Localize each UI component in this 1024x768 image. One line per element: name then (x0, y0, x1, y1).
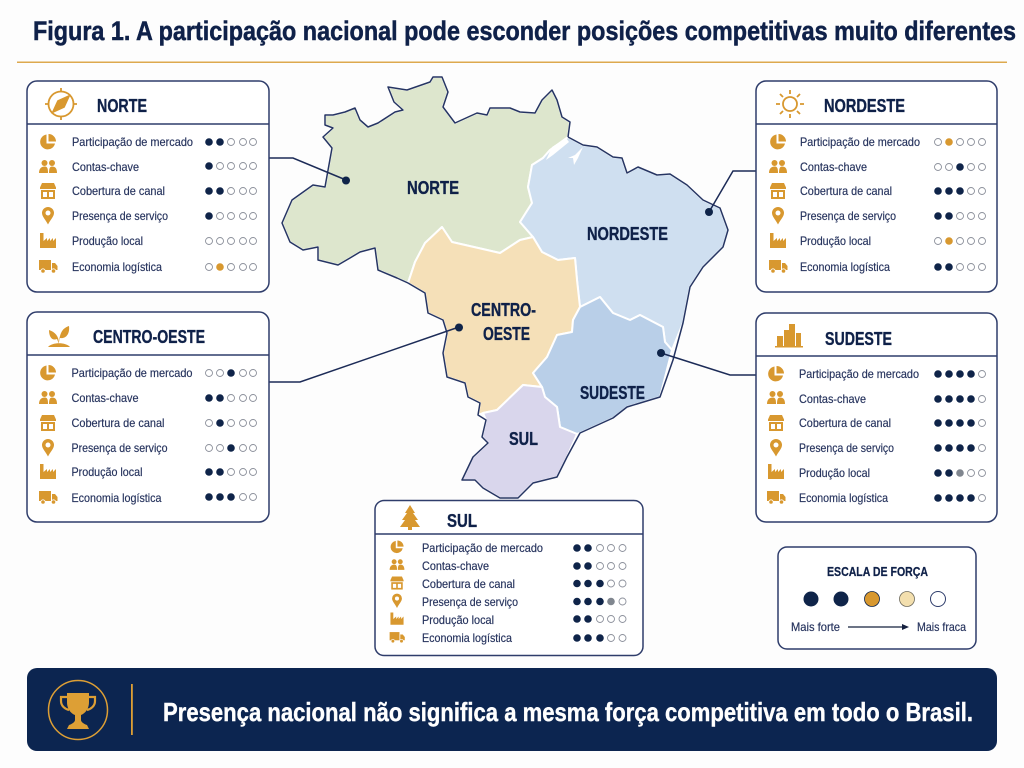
row: Cobertura de canal: Cobertura de canal (72, 416, 164, 430)
row: Contas-chave (769, 160, 986, 174)
row: Participação de mercado: Participação de mercado (72, 366, 193, 380)
row: Produção local: Produção local (800, 234, 871, 248)
row: Produção local (40, 464, 256, 479)
row: Presença de serviço (392, 594, 626, 609)
row: Economia logística (39, 491, 256, 505)
legend: escala de força: ESCALA DE FORÇA (827, 564, 928, 579)
panel: Centro-Oeste (27, 312, 269, 522)
row: Participação de mercado: Participação de mercado (799, 367, 919, 381)
row: Presença de serviço: Presença de serviço (799, 441, 894, 455)
heading: NORDESTE (824, 96, 905, 116)
row: Participação de mercado: Participação de mercado (422, 541, 543, 555)
panel: Nordeste (756, 81, 997, 292)
legend: escala de força: Mais fraca (917, 620, 966, 634)
row: Cobertura de canal: Cobertura de canal (72, 184, 165, 198)
heading: SUDESTE (825, 329, 892, 349)
icon: sprout (48, 326, 70, 347)
icon: compass (45, 88, 77, 120)
row: Presença de serviço: Presença de serviço (800, 209, 896, 223)
region: Norte (282, 77, 570, 283)
row: Produção local (768, 464, 986, 480)
leader: Nordeste (705, 171, 756, 216)
map label: CENTRO-OESTE (471, 300, 536, 344)
row: Presença de serviço: Presença de serviço (72, 209, 168, 223)
icon: sun (776, 90, 804, 118)
row: Contas-chave (390, 559, 626, 573)
row: Produção local (770, 233, 986, 248)
panel: Sul (375, 500, 643, 656)
heading: NORTE (97, 96, 147, 116)
row: Contas-chave: Contas-chave (799, 392, 866, 406)
row: Participação de mercado: Participação de mercado (800, 135, 920, 149)
row: Cobertura de canal (768, 415, 986, 431)
region: Sul (462, 385, 577, 498)
row: Economia logística (767, 491, 986, 505)
row: Cobertura de canal: Cobertura de canal (799, 416, 891, 430)
row: Participação de mercado (770, 134, 986, 149)
row: Contas-chave: Contas-chave (422, 559, 489, 573)
region: Nordeste (520, 137, 728, 350)
row: Produção local (40, 233, 256, 248)
map label: SUDESTE: SUDESTE (580, 383, 645, 403)
row: Contas-chave (39, 160, 256, 174)
row: Produção local: Produção local (72, 465, 142, 479)
icon: bars (775, 324, 803, 348)
legend: escala de força (778, 547, 976, 649)
row: Cobertura de canal (40, 183, 256, 199)
row: Contas-chave (39, 391, 256, 405)
leader: Norte (269, 158, 350, 184)
row: Participação de mercado (40, 134, 257, 149)
row: Presença de serviço: Presença de serviço (72, 441, 168, 455)
heading: CENTRO-OESTE (93, 327, 205, 347)
map of Brazil (282, 77, 728, 498)
row: Presença de serviço (42, 207, 256, 224)
row: Contas-chave (767, 391, 986, 406)
banner (27, 668, 997, 751)
row: Produção local: Produção local (799, 466, 870, 480)
row: Economia logística: Economia logística (800, 260, 890, 274)
icon: trophy (48, 680, 108, 740)
panel: Norte (27, 81, 269, 292)
row: Produção local: Produção local (422, 613, 494, 627)
row: Contas-chave: Contas-chave (800, 160, 867, 174)
map label: NORDESTE: NORDESTE (587, 224, 668, 244)
row: Participação de mercado: Participação de mercado (72, 135, 193, 149)
row: Cobertura de canal (40, 415, 256, 431)
row: Produção local: Produção local (72, 234, 143, 248)
region: Sudeste (533, 297, 672, 434)
row: Economia logística: Economia logística (72, 491, 162, 505)
panel: Sudeste (756, 313, 997, 522)
row: Participação de mercado (768, 366, 986, 381)
row: Economia logística (769, 260, 986, 274)
row: Economia logística: Economia logística (72, 260, 162, 274)
row: Economia logística (39, 260, 256, 274)
row: Cobertura de canal (390, 576, 626, 591)
leader: Sudeste (657, 349, 756, 375)
row: Presença de serviço: Presença de serviço (422, 595, 518, 609)
row: Contas-chave: Contas-chave (72, 160, 139, 174)
row: Presença de serviço (770, 439, 986, 456)
row: Cobertura de canal (770, 183, 986, 199)
row: Economia logística (390, 631, 626, 645)
row: Economia logística: Economia logística (422, 631, 512, 645)
legend: escala de força: Mais forte (791, 620, 840, 634)
icon: pine tree (400, 505, 420, 530)
row: Economia logística: Economia logística (799, 491, 888, 505)
map label: CENTRO-OESTE: CENTRO- (471, 300, 536, 320)
heading: SUL (447, 511, 477, 531)
map label: NORTE: NORTE (407, 178, 459, 198)
row: Participação de mercado (391, 540, 626, 555)
region: Centro-Oeste (408, 227, 580, 415)
row: Participação de mercado (40, 365, 257, 380)
row: Contas-chave: Contas-chave (72, 391, 139, 405)
row: Produção local (390, 612, 626, 627)
row: Cobertura de canal: Cobertura de canal (800, 184, 892, 198)
row: Cobertura de canal: Cobertura de canal (422, 577, 515, 591)
leader: Centro-Oeste (269, 324, 463, 382)
row: Presença de serviço (772, 207, 986, 224)
row: Presença de serviço (42, 439, 256, 456)
map label: CENTRO-OESTE: OESTE (483, 324, 530, 344)
map label: SUL: SUL (509, 429, 538, 449)
